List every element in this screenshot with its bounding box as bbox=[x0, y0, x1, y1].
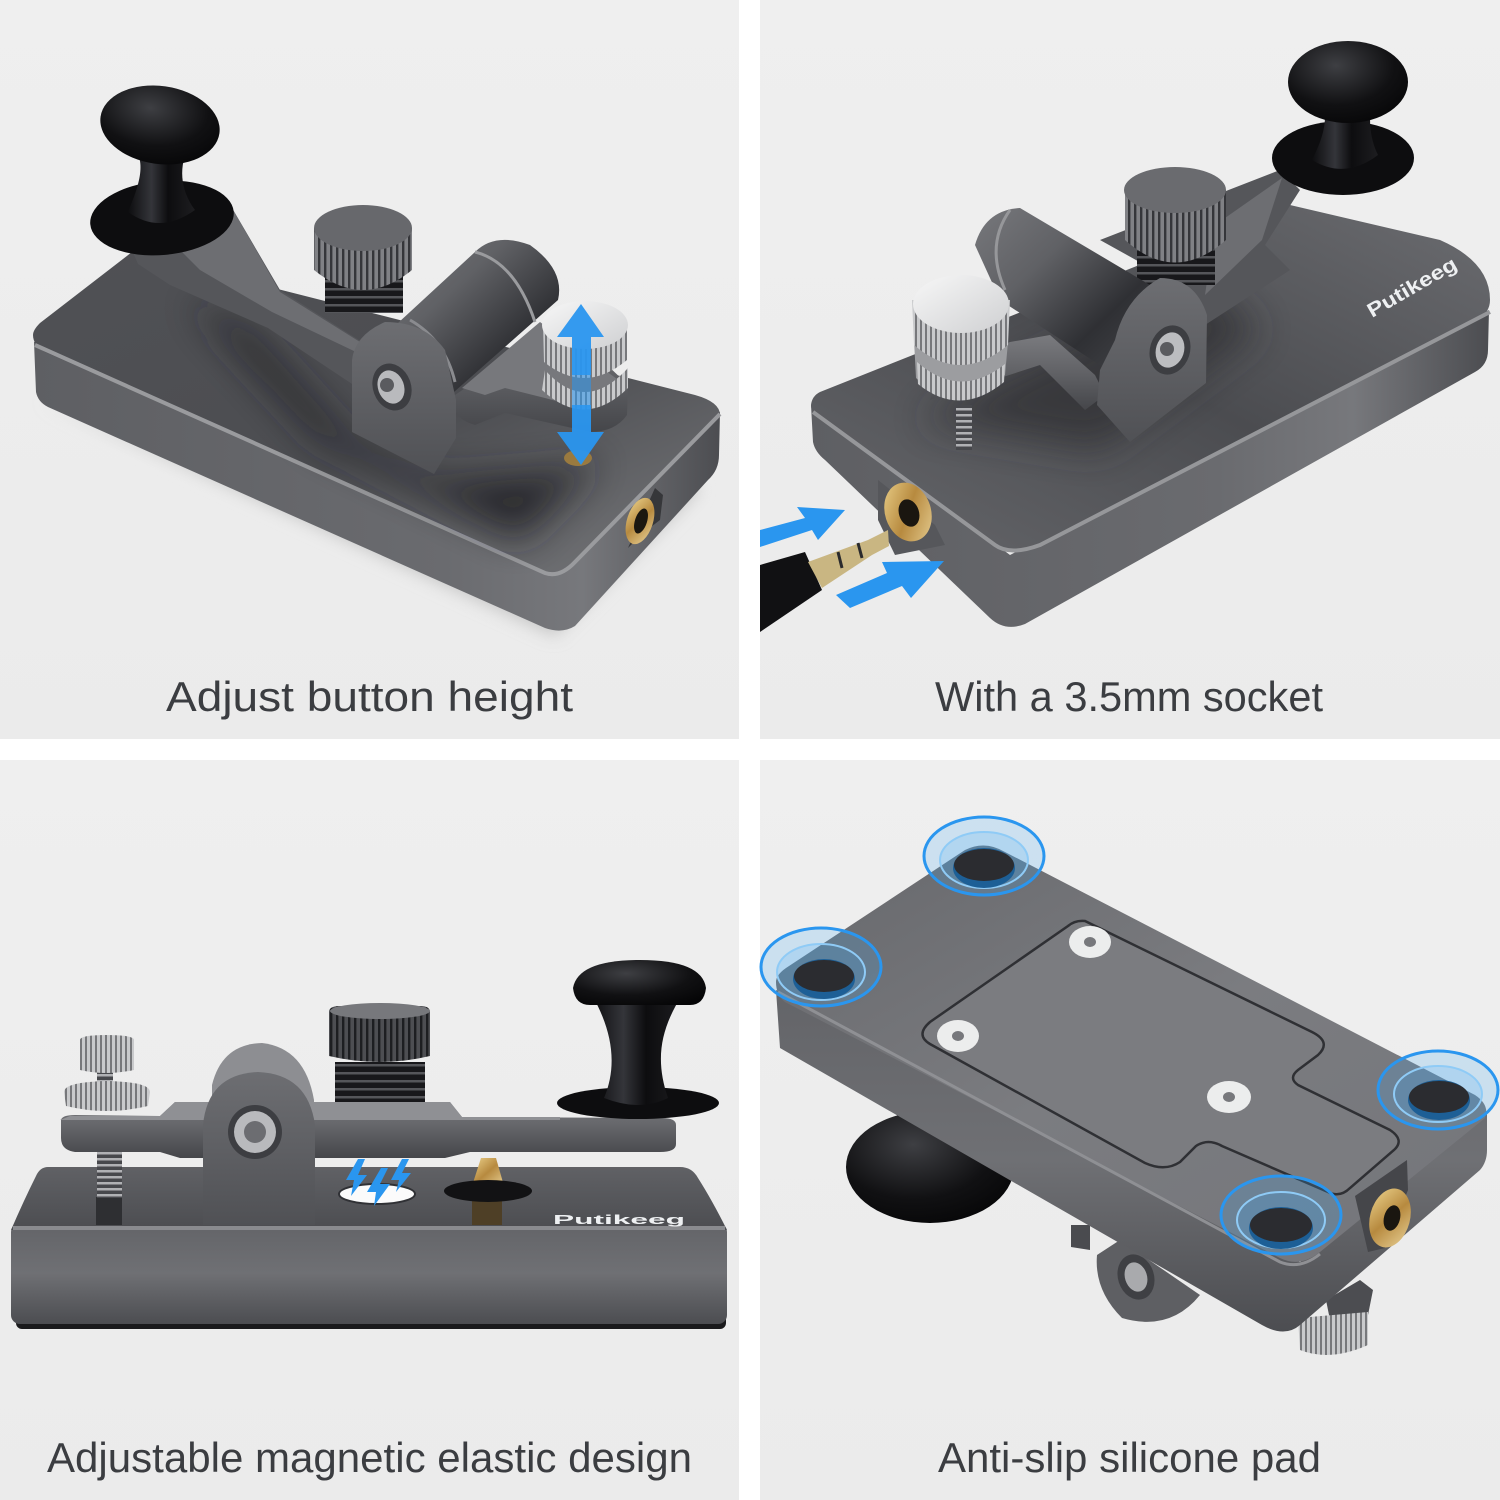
magnet window bbox=[339, 1184, 415, 1204]
pivot yoke bbox=[352, 322, 456, 474]
base top bbox=[33, 252, 720, 572]
pivot yoke bbox=[1097, 278, 1207, 442]
silver knob bbox=[80, 1035, 134, 1073]
silver knurled knob bbox=[542, 301, 628, 410]
black knob dome bbox=[95, 78, 225, 172]
audio plug bbox=[760, 530, 889, 632]
plate screws bbox=[937, 926, 1251, 1113]
black flange bbox=[557, 1087, 719, 1119]
threaded stem below bbox=[1326, 1280, 1373, 1320]
caption: Adjust button height bbox=[166, 673, 573, 720]
panel: anti-slip silicone pad bbox=[760, 760, 1500, 1500]
pivot screw bbox=[1143, 320, 1197, 380]
blue arrow lower bbox=[836, 561, 944, 608]
lower arm bbox=[930, 335, 1105, 410]
silver knob below bbox=[1298, 1312, 1368, 1355]
brass reflection bbox=[472, 1200, 502, 1225]
brand label: Putikeeg bbox=[1364, 253, 1461, 322]
base top edge bbox=[13, 1226, 725, 1230]
lever arm bbox=[61, 1102, 676, 1158]
brass contact bbox=[472, 1158, 504, 1186]
black knob dome bbox=[1288, 41, 1408, 123]
base edge highlight bbox=[35, 345, 720, 574]
magnetic bolts bbox=[346, 1159, 411, 1206]
blue height arrow bbox=[557, 304, 604, 465]
knurled screw below bbox=[1071, 1225, 1090, 1250]
arm top face bbox=[60, 1102, 560, 1120]
adjusting thumbscrew bbox=[314, 205, 412, 313]
lower arm bbox=[455, 315, 628, 432]
base edge highlight bbox=[778, 992, 1320, 1265]
black flange bbox=[1272, 121, 1414, 195]
pad ripple left bbox=[761, 928, 881, 1006]
silver knurled knob bbox=[912, 275, 1010, 450]
pivot screw bbox=[1112, 1250, 1160, 1304]
brand label: Putikeeg bbox=[553, 1212, 685, 1227]
blue arrow upper bbox=[760, 507, 845, 547]
socket jack bbox=[877, 476, 945, 555]
base side bbox=[34, 335, 720, 631]
lever arm top face bbox=[1205, 178, 1282, 295]
socket notch and jack bbox=[620, 488, 663, 548]
arm upper face bbox=[170, 208, 360, 352]
black dome bbox=[573, 960, 706, 1005]
pivot screw bbox=[228, 1105, 282, 1159]
base top bbox=[11, 1167, 727, 1230]
black knob stem bbox=[128, 145, 195, 223]
caption: With a 3.5mm socket bbox=[935, 673, 1323, 720]
pad ripple bottom bbox=[1221, 1176, 1341, 1254]
arm top face bbox=[462, 322, 625, 410]
pivot yoke bbox=[203, 1072, 315, 1225]
pivot barrel bbox=[975, 208, 1150, 375]
black stem bbox=[592, 995, 682, 1105]
base side bbox=[811, 310, 1489, 627]
silver nut bbox=[64, 1081, 150, 1111]
silver upper shaft bbox=[97, 1070, 113, 1090]
pivot barrel bbox=[385, 240, 559, 400]
socket jack bbox=[1355, 1160, 1417, 1252]
adjusting thumbscrew bbox=[1124, 167, 1226, 285]
black flange bbox=[87, 175, 237, 261]
base side bbox=[776, 990, 1487, 1332]
pad ripple right bbox=[1378, 1051, 1498, 1129]
panel: adjust button height bbox=[0, 0, 739, 739]
base side bbox=[11, 1223, 727, 1324]
contact shadow on base bbox=[190, 300, 600, 540]
yoke below bbox=[1097, 1240, 1200, 1322]
shaft reflection bbox=[96, 1197, 122, 1225]
big thumbscrew bbox=[329, 1003, 430, 1120]
black knob behind bbox=[846, 1111, 1014, 1223]
pivot screw bbox=[366, 358, 418, 416]
lever arm bbox=[132, 208, 362, 384]
black knob stem bbox=[1312, 95, 1378, 169]
base edge highlight bbox=[813, 312, 1490, 550]
cover plate outline bbox=[922, 921, 1399, 1194]
pad ripple top bbox=[924, 817, 1044, 895]
black contact disc bbox=[444, 1180, 532, 1202]
caption: Adjustable magnetic elastic design bbox=[47, 1434, 692, 1481]
base underside bbox=[776, 845, 1486, 1262]
lever arm bbox=[1100, 170, 1300, 325]
base black foot bbox=[16, 1300, 726, 1329]
cylinder behind yoke bbox=[212, 1043, 314, 1140]
panel: 3.5mm socket bbox=[760, 0, 1500, 739]
base shadow bbox=[40, 400, 700, 636]
caption: Anti-slip silicone pad bbox=[938, 1434, 1321, 1481]
brass contact bbox=[564, 450, 592, 466]
silver lower shaft bbox=[97, 1152, 122, 1198]
panel: magnetic elastic design bbox=[0, 760, 739, 1500]
base top bbox=[811, 205, 1490, 549]
contact shadow on base bbox=[920, 280, 1260, 450]
